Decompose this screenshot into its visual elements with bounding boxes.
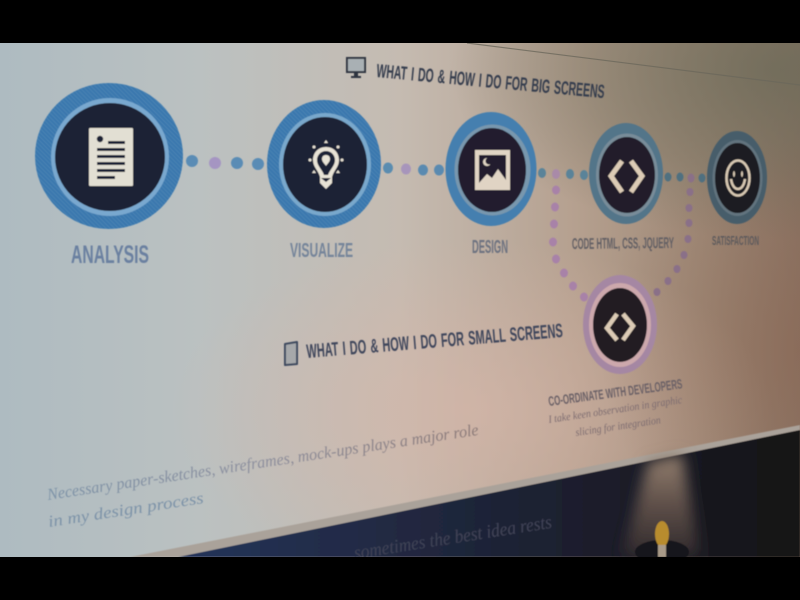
- icon: code brackets: [607, 314, 633, 340]
- step: design: [446, 112, 536, 257]
- step: code: [572, 123, 674, 253]
- label: ANALYSIS: [71, 241, 149, 269]
- icon: light bulb: [308, 140, 344, 189]
- step: analysis: [35, 83, 183, 269]
- icon: smiley: [726, 160, 750, 196]
- icon: document: [89, 128, 133, 186]
- description line 1: I take keen observation in graphic: [547, 394, 683, 426]
- label: CODE HTML, CSS, JQUERY: [572, 235, 674, 253]
- step: visualize: [267, 100, 381, 262]
- footer quote: sometimes the best idea rests: [352, 512, 553, 564]
- heading text: WHAT I DO & HOW I DO FOR BIG SCREENS: [376, 61, 605, 103]
- icon: tablet: [285, 342, 297, 365]
- heading text: WHAT I DO & HOW I DO FOR SMALL SCREENS: [306, 320, 564, 363]
- description line 2: slicing for integration: [575, 414, 662, 439]
- label: CO-ORDINATE WITH DEVELOPERS: [547, 376, 683, 409]
- note text: in my design process: [47, 488, 205, 531]
- title: small screens: [285, 320, 564, 365]
- icon: monitor: [347, 58, 365, 78]
- note text: Necessary paper-sketches, wireframes, mock-ups plays a major role: [45, 420, 480, 504]
- dark footer band with lamp: [130, 425, 800, 564]
- label: VISUALIZE: [290, 240, 353, 262]
- icon: picture: [475, 150, 510, 190]
- connector dots: main path: [186, 155, 706, 182]
- step: co-ordinate with developers: [547, 275, 683, 439]
- label: DESIGN: [472, 237, 508, 257]
- step: satisfaction: [707, 131, 767, 248]
- connector dots: branch to developers: [549, 186, 694, 302]
- icon: code brackets: [611, 161, 642, 192]
- title: big screens: [347, 58, 605, 103]
- icon: lamp: [635, 521, 689, 564]
